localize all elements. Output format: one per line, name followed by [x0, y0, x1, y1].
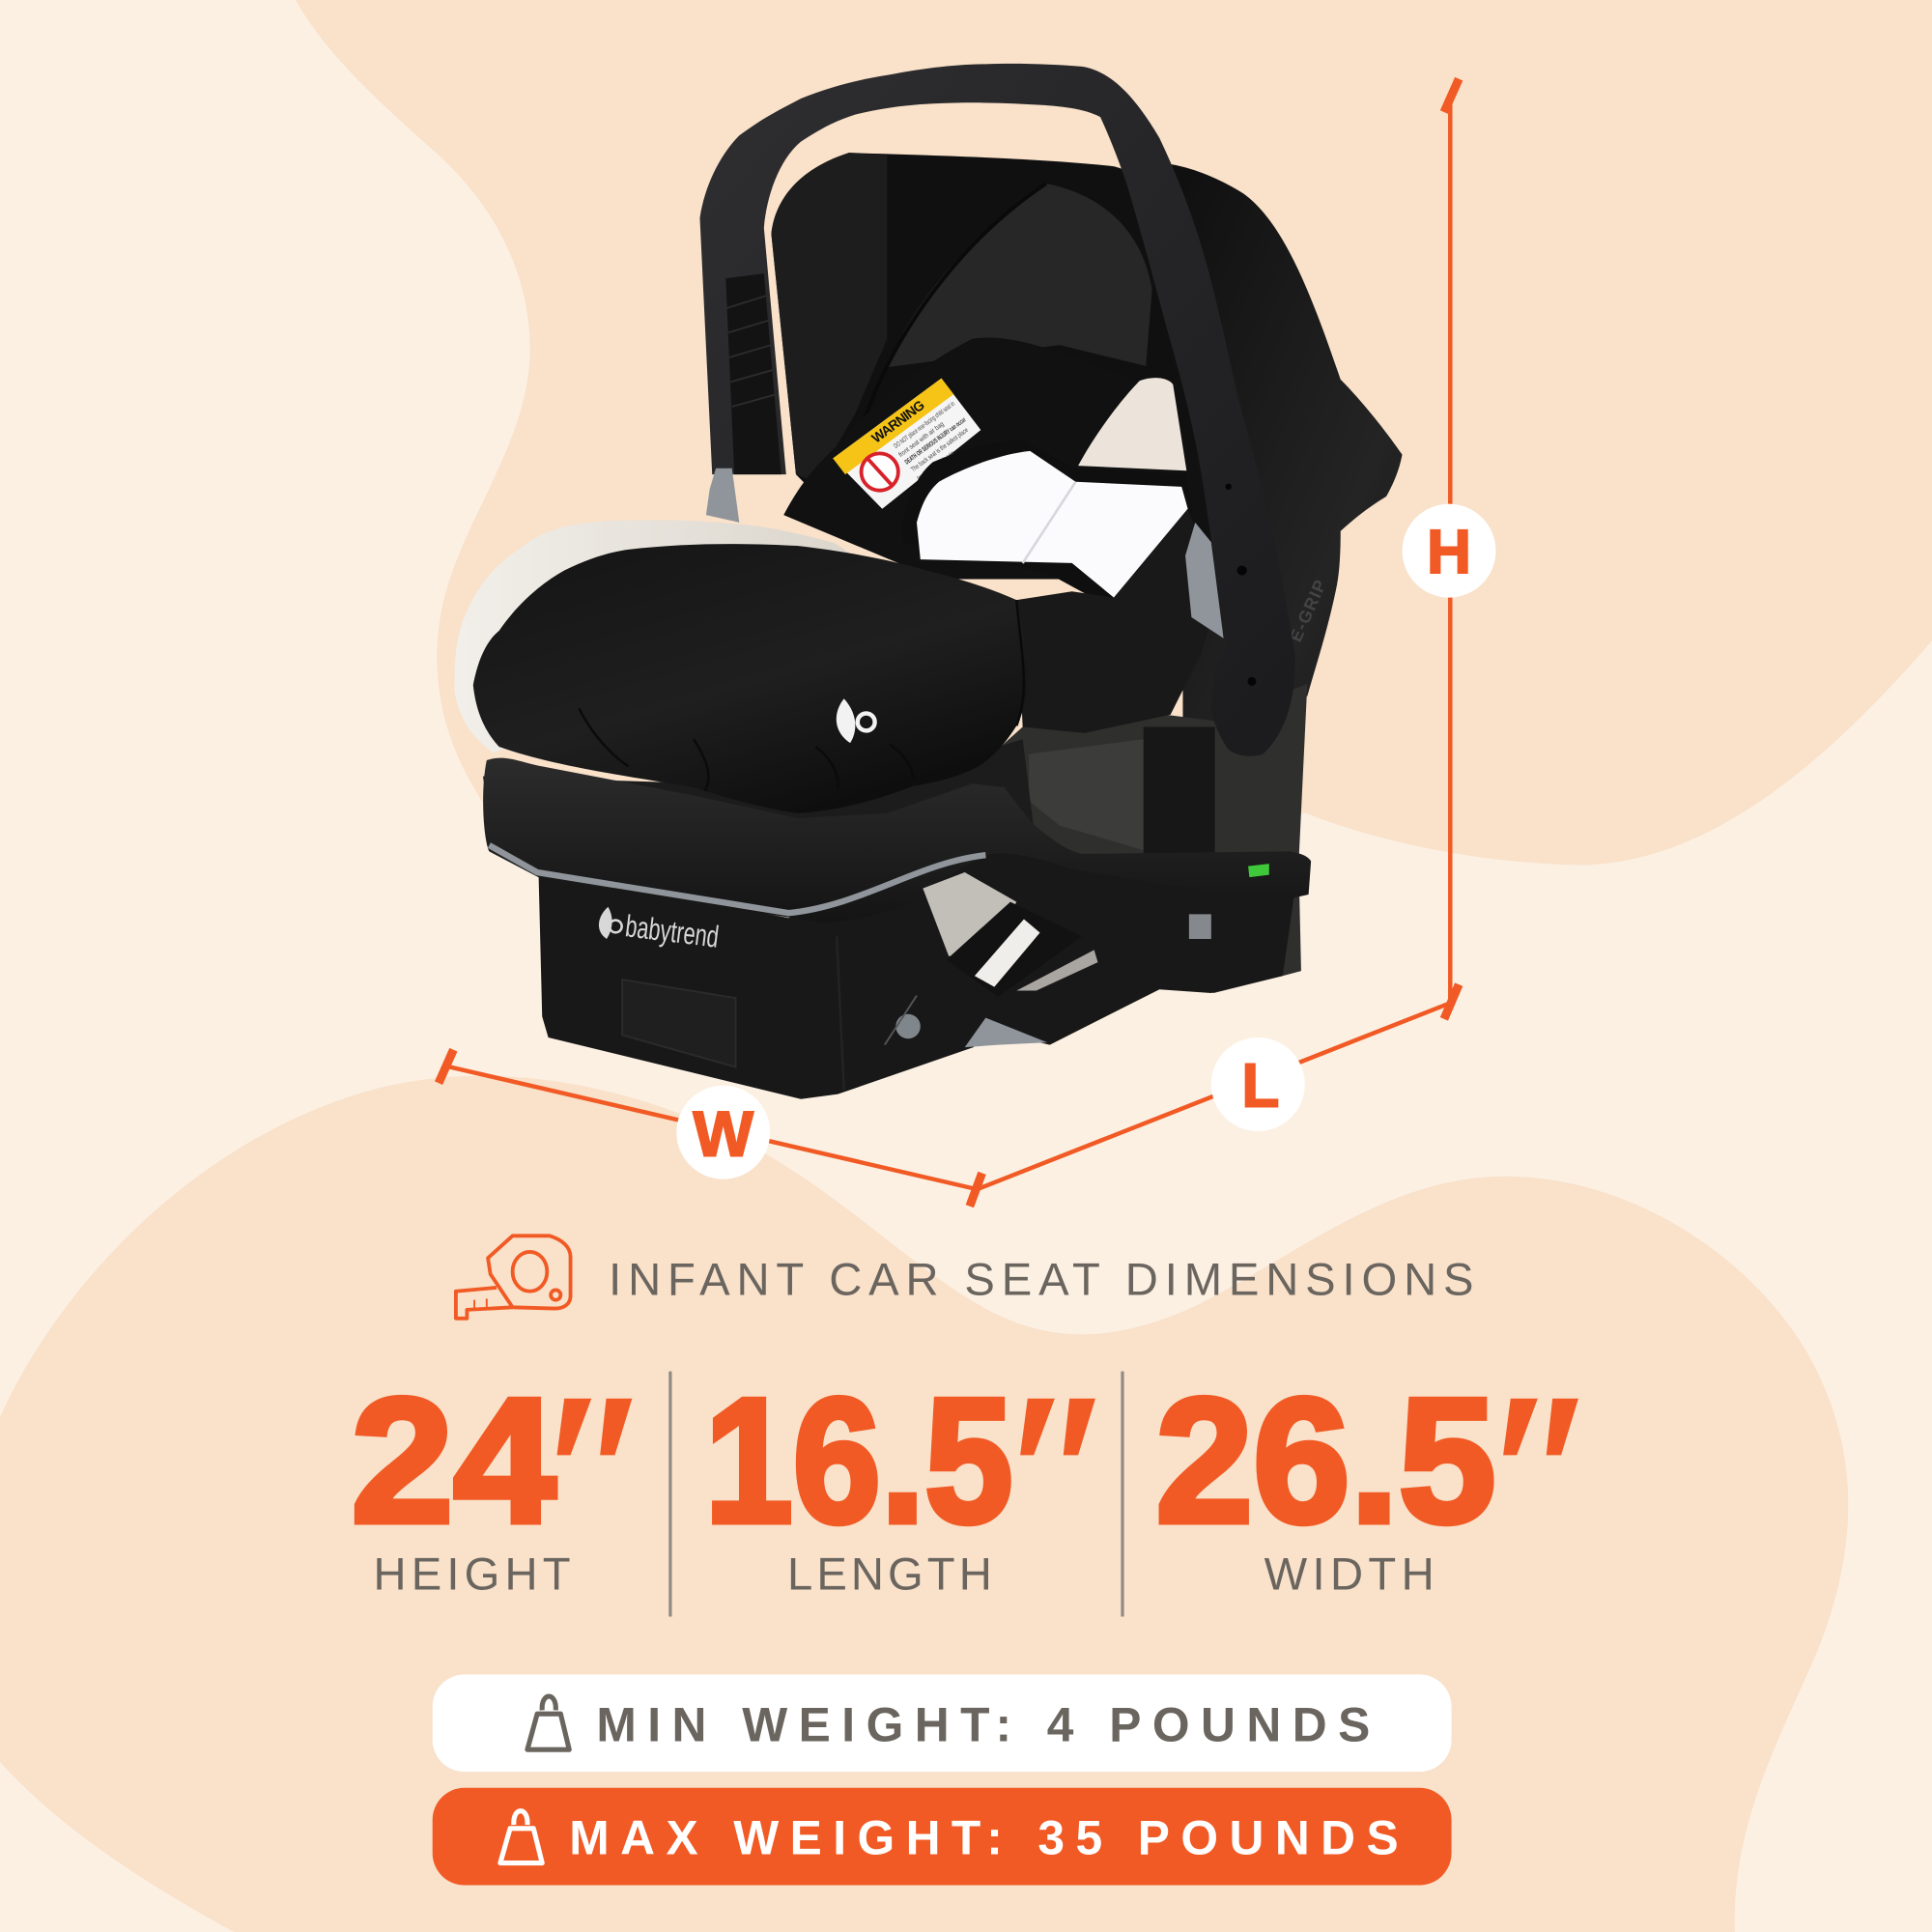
babytrend wordmark: babytrend: [623, 908, 721, 954]
pill: min weight: MIN WEIGHT: 4 POUNDS: [596, 1697, 1370, 1751]
footmuff grey backing: [454, 520, 887, 753]
grey clip left: [706, 469, 739, 523]
dimension line: length: [975, 1003, 1450, 1190]
tray fill below footmuff: [483, 739, 1035, 863]
stat: height: [352, 1361, 632, 1600]
background blob: top: [296, 0, 1932, 865]
handle pivot screws: [1225, 484, 1256, 686]
pill: max weight: [433, 1788, 1452, 1886]
right grey clip: [1185, 523, 1224, 639]
stat: height: HEIGHT: [373, 1548, 571, 1600]
warning sticker: WARNING: [868, 397, 927, 446]
beige cushion: [1078, 378, 1186, 470]
base lower box: [538, 850, 1296, 1099]
dimension line: height: [1403, 79, 1495, 1019]
icon: tape measure: [456, 1236, 571, 1319]
e-grip text: E-GRIP: [1286, 576, 1330, 644]
dimension line: height: H: [1427, 517, 1471, 586]
stat: height: 24: [352, 1361, 555, 1559]
crumpled foot fabric right: [1016, 509, 1220, 733]
canopy exterior: [1158, 162, 1403, 739]
babytrend wordmark: [597, 905, 721, 954]
warning sticker: for children 12 and under: [917, 450, 956, 482]
base tray rim: [483, 758, 1311, 923]
shell grille: [725, 273, 781, 474]
white chest pad: [903, 441, 1193, 610]
warning sticker: DEATH OR SERIOUS INJURY can occur: [904, 416, 968, 466]
dimension line: width: W: [693, 1098, 753, 1170]
stat: width: 26.5: [1155, 1361, 1495, 1559]
green level indicator: [1248, 864, 1269, 877]
grey latch: [1189, 914, 1211, 939]
divider: [669, 1372, 671, 1616]
stat: width: [1155, 1361, 1578, 1600]
stat: width: WIDTH: [1264, 1548, 1435, 1600]
icon: weight: [500, 1811, 542, 1863]
recline knob: [885, 996, 921, 1045]
pill: max weight: MAX WEIGHT: 35 POUNDS: [569, 1811, 1399, 1865]
seat liner: [783, 337, 1213, 579]
grey trim stripe: [489, 845, 985, 913]
warning sticker: The back seat is the safest place: [910, 427, 970, 473]
canopy left fabric: [771, 153, 887, 482]
footmuff black cover: [473, 544, 1027, 813]
pill: min weight: [433, 1674, 1452, 1772]
side shell and carry handle: [699, 64, 1295, 756]
warning sticker: front seat with air bag: [897, 421, 946, 459]
divider: [1122, 1372, 1123, 1616]
canopy interior: [771, 153, 1233, 542]
dimension line: length: L: [1241, 1050, 1279, 1120]
rear shell: [979, 684, 1307, 993]
seat belt buckle: [923, 872, 1097, 997]
dimension line: width: [439, 1050, 982, 1207]
heading: INFANT CAR SEAT DIMENSIONS: [609, 1255, 1474, 1306]
background blob: bottom: [0, 1076, 1848, 1932]
car seat photo: [454, 64, 1403, 1099]
warning sticker: [833, 379, 980, 509]
babytrend logo on cover: [837, 698, 875, 743]
stat: length: 16.5: [705, 1361, 1012, 1559]
canopy inner hood: [887, 184, 1152, 367]
stat: length: LENGTH: [787, 1548, 992, 1600]
icon: weight: [527, 1696, 569, 1749]
warning sticker: DO NOT place rear-facing child seat in: [893, 401, 956, 450]
